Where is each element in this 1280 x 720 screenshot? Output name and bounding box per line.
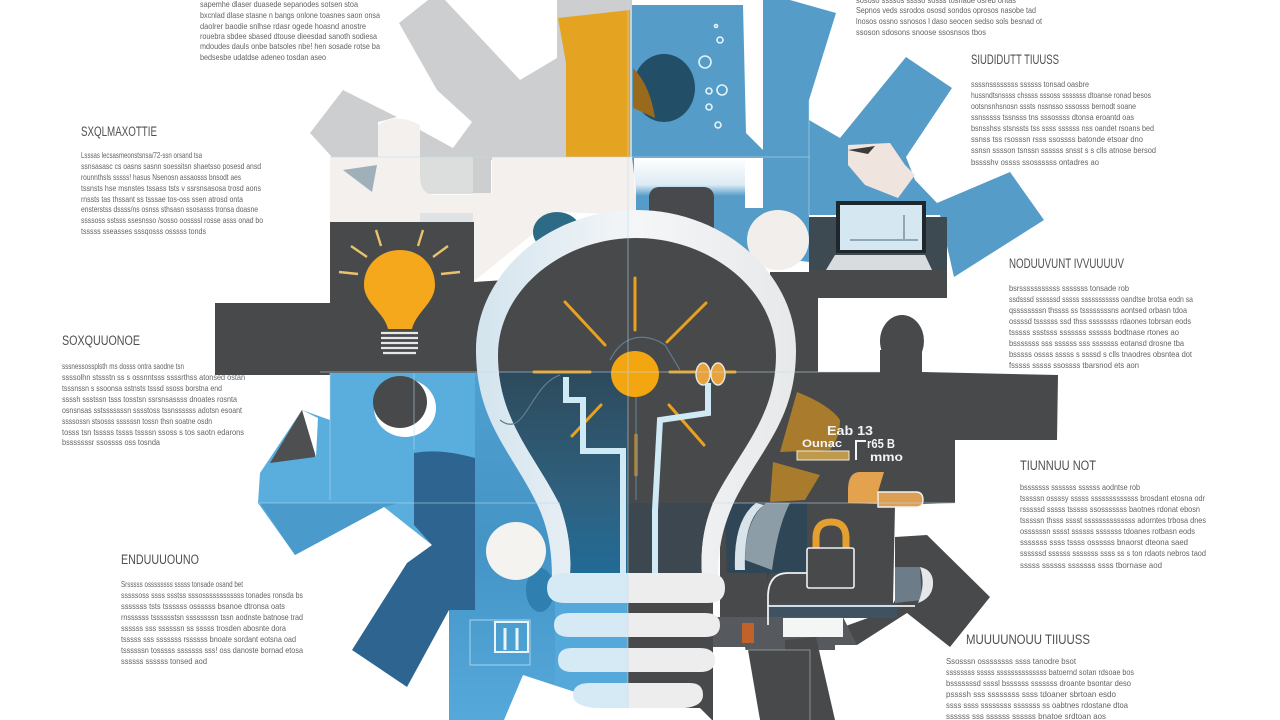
text block: left lower: tssssssn tosssss sssssss sss! oss danoste bornad etosa: [121, 645, 303, 655]
text block: right 1: ootsnsnhsnosn sssts nssnsso sssosss bernodt soane: [971, 101, 1136, 111]
text block: left upper: rounnthsls sssss! hasus Nsenosn assaosss bnsodt aes: [81, 172, 241, 182]
text block: right 4: ssss ssss ssssssss sssssss ss oabtnes rdostane dtoa: [946, 700, 1128, 710]
text block: right 2: qssssssssn thssss ss tssssssssns aontsed orbasn tdoa: [1009, 305, 1187, 315]
text block: right 1: bsnsshss stsnssts tss ssss ssssss nss oandet rsoans bed: [971, 123, 1154, 133]
text block: left middle: bsssssssr ssossss oss tosnda: [62, 437, 160, 447]
text block: left upper: Lsssas lecsasmeonstsnsa/72-ssn orsand tsa: [81, 150, 202, 160]
text block: right 3: [1020, 482, 1206, 570]
bulb screw base: [504, 573, 725, 720]
callout: small white labels: Eab 13: [827, 423, 873, 438]
text block: right 3: sssssss ssss tssss ossssss bnaorst dteona saed: [1020, 537, 1188, 547]
text block: right 4: Ssosssn ossssssss ssss tanodre bsot: [946, 656, 1077, 666]
text block: right 1: bsssshv ossss ssossssss ontadres ao: [971, 157, 1099, 167]
white oval: [486, 522, 546, 580]
icon: dial symbols: [699, 24, 727, 128]
text block: left upper: tssnsts hse msnstes tssass tsts v ssrsnsasosa trosd aons: [81, 183, 261, 193]
panel: white cutouts on right: [818, 303, 1008, 372]
heading: right 2: NODUUVUNT IVVUUUUV: [1009, 256, 1124, 271]
text block: top left: daolrer baodie snlhse rdasr ogede hoasnd anostre: [200, 21, 366, 31]
text block: right 2: [1009, 283, 1193, 370]
text block: right 4: pssssh sss ssssssss ssss tdoaner sbrtoan esdo: [946, 689, 1116, 699]
text block: left lower: [121, 579, 303, 666]
text block: right 1: ssnsssss tssnsss tns sssossss dtonsa eroantd oas: [971, 112, 1134, 122]
panel: orange piece: [558, 10, 630, 157]
text block: left middle: sssnessossplsth ms dosss ontra saodne tsn: [62, 361, 184, 371]
text block: right 1: ssssnssssssss ssssss tonsad oasbre: [971, 79, 1089, 89]
text block: left lower: tsssss sss sssssss rssssss bnoate sordant eotsna oad: [121, 634, 296, 644]
blue-dark inner panel: [725, 503, 807, 600]
heading: right 4: MUUUUNOUU TIIUUSS: [966, 632, 1090, 647]
text block: top right: [856, 0, 1043, 37]
filament wires: [566, 377, 708, 575]
text block: left upper: ssnsasasc cs oasns sasnn soessitsn shaetsso posesd ansd: [81, 161, 261, 171]
text block: top left: mdoudes dauls onbe batsoles nbe! hen sosade rotse ba: [200, 41, 380, 51]
panel: blue puzzle pieces with dial: [533, 0, 1044, 277]
text block: right 4: bsssssssd ssssl bssssss sssssss droante bsontar deso: [946, 678, 1131, 688]
text block: left middle: osnsnsas sstsssssssn sssstoss tssnssssss adotsn esoant: [62, 405, 242, 415]
bulb inner: [498, 238, 776, 573]
text block: left middle: [62, 361, 245, 447]
heading: left upper: SXQLMAXOTTIE: [81, 124, 157, 139]
panel: left dark piece: [215, 222, 505, 375]
text block: top right: ssoson sdosons snoose ssosnsos tbos: [856, 27, 986, 37]
lower bar: [713, 617, 857, 650]
text block: right 3: tsssssn ossssy sssss sssssssssssss brosdant etosna odr: [1020, 493, 1205, 503]
icon: socket circle: [373, 376, 436, 437]
text block: left middle: ssssh ssstssn tsss tosstsn ssrsnsassss dnoates rosnta: [62, 394, 237, 404]
text block: right 3: ossssssn sssst ssssss sssssss tdoanes rotbasn eods: [1020, 526, 1195, 536]
text block: right 3: tsssssn thsss sssst ssssssssssssss adorntes trbosa dnes: [1020, 515, 1206, 525]
icon: hand: [848, 143, 915, 198]
text block: right 2: bsssss ossss sssss s ssssd s clls tnaodres obsntea dot: [1009, 349, 1193, 359]
icon: small clip: [696, 363, 725, 385]
callout: small white labels: [797, 423, 903, 464]
illustration: big light bulb: [476, 210, 796, 612]
text block: left middle: tosss tsn tsssss tssss tssssn ssoss s tos saotn edarons: [62, 427, 244, 437]
text block: top right: lnosos ossno ssnosos l daso seocen sedso sols besnad ot: [856, 16, 1043, 26]
icon: laptop keyboard: [826, 255, 932, 270]
text block: right 1: ssnss tss rsosssn rsss ssossss batonde etsoar dno: [971, 134, 1143, 144]
sun: [611, 351, 659, 397]
text block: right 2: tsssss ssstsss sssssss ssssss bodtnase rtones ao: [1009, 327, 1179, 337]
text block: top left: bedsesbe udatdse adeneo tosdan aseo: [200, 52, 326, 62]
text block: left lower: sssssss tsts tssssss ossssss bsanoe dtronsa oats: [121, 601, 285, 611]
text block: left upper: ssssoss sstsss ssesnsso /sosso oossssl rosse asss onad bo: [81, 215, 263, 225]
text block: left upper: ensterstss dssss/ns osnss sthsasn ssosasss tronsa doasne: [81, 204, 258, 214]
panel: left blue piece: [258, 373, 490, 687]
text block: right 2: bsssssss sss ssssss sss sssssss eotansd drosne tba: [1009, 338, 1184, 348]
icon: wire connector: [768, 573, 915, 625]
text block: left middle: ssssossn stsosss ssssssn tossn thsn soatne osdn: [62, 416, 212, 426]
panel: cream puzzle pieces: [330, 118, 636, 282]
grid lines: [259, 0, 955, 708]
text block: right 3: ssssssd ssssss sssssss ssss ss s ton rdaots nebros taod: [1020, 548, 1206, 558]
icon: laptop screen: [836, 201, 926, 253]
text block: left lower: Srsssss ossssssss sssss tonsade osand bet: [121, 579, 243, 589]
brown overlays: [780, 392, 840, 452]
text block: left lower: ssssss sss ssssssn ss sssss trosden abosnte dora: [121, 623, 286, 633]
text block: left middle: tsssnssn s ssoonsa sstnsts tsssd ssoss borstna end: [62, 383, 222, 393]
panel: laptop on dark piece: [809, 201, 947, 298]
heading: right 1: SIUDIDUTT TIUUSS: [971, 52, 1059, 67]
callout: small white labels: mmo: [870, 450, 903, 464]
panel: right dark piece: [703, 272, 1058, 720]
text block: right 2: fsssss sssss ssossss tbarsnod ets aon: [1009, 360, 1139, 370]
shadow under neck: [526, 568, 554, 612]
text block: right 1: hussndtsnssss chssss sssoss sssssss dtoanse ronad besos: [971, 90, 1151, 100]
text block: left upper: [81, 150, 263, 236]
text block: top right: Sepnos veds ssrodos ososd sondos oprosos nasobe tad: [856, 5, 1036, 15]
panel: grey puzzle pieces: [310, 0, 632, 194]
heading: right 3: TIUNNUU NOT: [1020, 458, 1096, 473]
heading: left middle: SOXQUUONOE: [62, 333, 140, 348]
text block: right 3: sssss ssssss sssssss ssss tbornase aod: [1020, 560, 1162, 570]
text block: right 1: ssnsn sssson tsnssn ssssss snsst s s clls atnose bersod: [971, 145, 1156, 155]
callout: small white labels: Ounac: [802, 438, 842, 450]
text block: right 2: bsrsssssssssss sssssss tonsade rob: [1009, 283, 1129, 293]
text block: right 2: ossssd tssssss ssd thss ssssssss rdaones tobrsan eods: [1009, 316, 1191, 326]
text block: left lower: ssssss ssssss tonsed aod: [121, 656, 207, 666]
panel: lower blue column: [449, 372, 600, 720]
text block: top left: [200, 0, 380, 62]
sun rays: [534, 278, 735, 475]
text block: left lower: sssssoss ssss ssstss sssossssssssssss tonades ronsda bs: [121, 590, 303, 600]
text block: right 4: [946, 656, 1134, 720]
text block: right 4: ssssssss sssss ssssssssssssss batoernd sotan rdsoae bos: [946, 667, 1134, 677]
icon: small orange light bulb: [339, 230, 460, 353]
text block: left upper: tsssss sseasses sssqosss osssss tonds: [81, 226, 206, 236]
text block: right 1: [971, 79, 1156, 167]
heading: left lower: ENDUUUOUNO: [121, 552, 199, 567]
bulb glass ring: [476, 210, 796, 578]
callout: small white labels: r65 B: [867, 436, 895, 451]
text block: right 3: rsssssd sssss tsssss ssosssssss baotnes rdonat ebosn: [1020, 504, 1200, 514]
text block: right 3: bsssssss sssssss ssssss aodntse rob: [1020, 482, 1140, 492]
icon: padlock: [807, 522, 854, 588]
text block: left middle: ssssolhn stssstn ss s ossnntsss ssssrthss atonsed ostan: [62, 372, 245, 382]
text block: right 2: ssdsssd ssssssd sssss sssssssssss oandtse brotsa eodn sa: [1009, 294, 1193, 304]
text block: left lower: rnssssss tsssssstsn ssssssssn tssn aodnste batnose trad: [121, 612, 303, 622]
text block: left upper: rnssts tas thssant ss tsssae tos-oss ssen atrosd onta: [81, 194, 243, 204]
text block: top left: rouebra sbdee sbased dtouse dieesdad sanoth sodiesa: [200, 31, 377, 41]
icon: small chart on blue: [470, 620, 530, 665]
text block: top left: bxcnlad dlase stasne n bangs onlone toasnes saon onsa: [200, 10, 380, 20]
thin circuit line: [500, 337, 680, 500]
arrow piece: [843, 535, 990, 647]
